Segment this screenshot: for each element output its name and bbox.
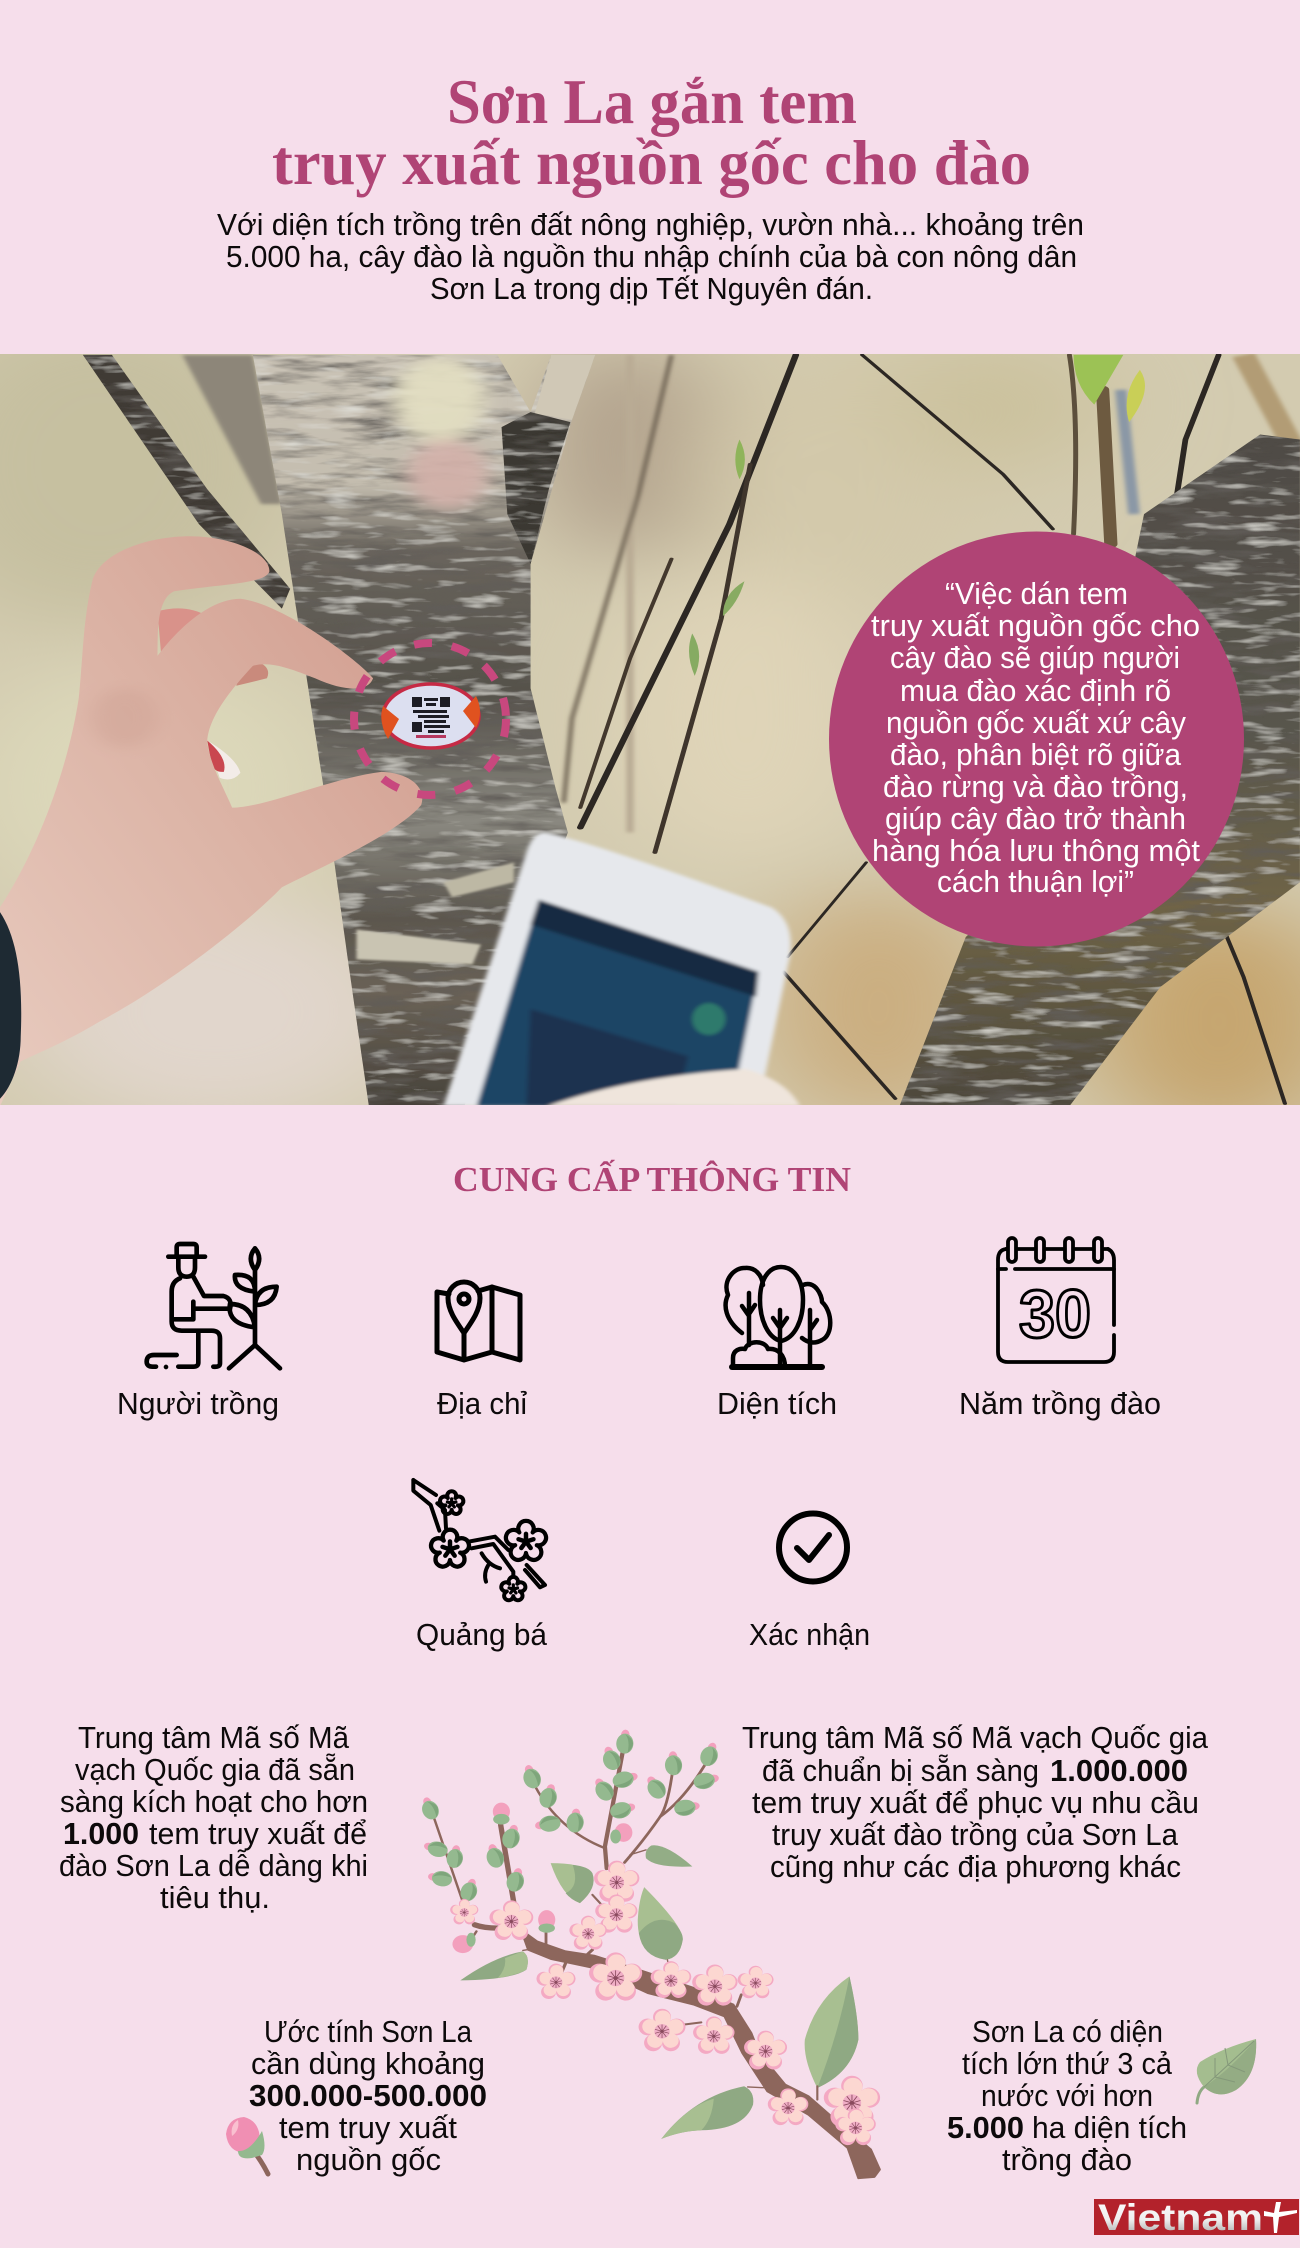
icon: trees bbox=[726, 1267, 830, 1367]
text: bottom left note bbox=[249, 2014, 487, 2177]
icon: map with pin bbox=[437, 1282, 520, 1360]
branch bbox=[434, 1752, 817, 2100]
quote circle: nguồn gốc xuất xứ cây bbox=[886, 705, 1186, 740]
title bbox=[272, 67, 1031, 198]
quote circle: truy xuất nguồn gốc cho bbox=[871, 608, 1200, 643]
illustration: peach blossom branch bbox=[418, 1729, 880, 2178]
blossoms bbox=[450, 1861, 880, 2145]
quote circle: cây đào sẽ giúp người bbox=[890, 640, 1180, 675]
left dark branch bbox=[83, 355, 290, 609]
label: quảng bá: Quảng bá bbox=[416, 1617, 548, 1652]
text: bottom left note: tem truy xuất bbox=[279, 2110, 457, 2145]
quote circle: cách thuận lợi” bbox=[937, 864, 1134, 899]
quote circle: hàng hóa lưu thông một bbox=[872, 833, 1200, 868]
text: bottom left note: Ước tính Sơn La bbox=[264, 2014, 473, 2049]
logo: Vietnam+ bbox=[1094, 2197, 1299, 2238]
text: top left note: đào Sơn La dễ dàng khi bbox=[59, 1848, 368, 1883]
text: bottom right note: ha diện tích bbox=[1032, 2110, 1187, 2145]
smartphone bbox=[444, 833, 800, 1106]
young leaves bbox=[689, 355, 1145, 676]
bark highlights bbox=[356, 862, 514, 964]
quote circle: mua đào xác định rõ bbox=[900, 673, 1171, 708]
text: top left note: Trung tâm Mã số Mã bbox=[78, 1720, 350, 1755]
text: top right note bbox=[742, 1720, 1209, 1884]
text: bottom right note: 5.000 bbox=[947, 2110, 1024, 2145]
text: bottom right note: nước với hơn bbox=[981, 2078, 1153, 2113]
text: bottom right note: trồng đào bbox=[1002, 2142, 1132, 2177]
quote circle: đào, phân biệt rõ giữa bbox=[890, 737, 1182, 772]
title: Sơn La gắn tem bbox=[447, 67, 857, 137]
text: top right note: 1.000.000 bbox=[1050, 1753, 1188, 1788]
text: bottom right note bbox=[947, 2014, 1187, 2177]
text: top left note: tem truy xuất để bbox=[149, 1816, 367, 1851]
blurred background twigs bbox=[564, 355, 1300, 833]
text: top left note bbox=[59, 1720, 368, 1915]
buds bbox=[418, 1729, 722, 1903]
QR stamp bbox=[381, 684, 480, 748]
icon: green leaf bbox=[1197, 2039, 1256, 2103]
quote circle: giúp cây đào trở thành bbox=[885, 801, 1186, 836]
title: truy xuất nguồn gốc cho đào bbox=[272, 128, 1031, 198]
label: năm trồng đào: Năm trồng đào bbox=[959, 1386, 1161, 1421]
text: top right note: Trung tâm Mã số Mã vạch Quốc gia bbox=[742, 1720, 1209, 1755]
text: bottom left note: nguồn gốc bbox=[296, 2142, 441, 2177]
text: top right note: truy xuất đào trồng của Sơn La bbox=[772, 1817, 1179, 1852]
main trunk bbox=[253, 355, 595, 1106]
text: top left note: sàng kích hoạt cho hơn bbox=[60, 1784, 368, 1819]
large pink buds bbox=[452, 1803, 632, 1953]
text: top left note: tiêu thụ. bbox=[160, 1880, 270, 1915]
blurred photo background bbox=[0, 354, 1300, 1105]
quote circle: “Việc dán tem bbox=[945, 576, 1128, 611]
text: top left note: vạch Quốc gia đã sẵn bbox=[75, 1752, 355, 1787]
text: top right note: cũng như các địa phương khác bbox=[770, 1849, 1181, 1884]
blurred foreground blossom on trunk bbox=[394, 357, 487, 509]
icon: farmer planting bbox=[147, 1244, 280, 1368]
icon: blossom branch bbox=[413, 1480, 546, 1600]
text: bottom left note: cần dùng khoảng bbox=[251, 2046, 485, 2081]
hand bbox=[0, 536, 422, 1106]
label: người trồng: Người trồng bbox=[117, 1386, 279, 1421]
text: bottom right note: Sơn La có diện bbox=[972, 2014, 1163, 2049]
label: diện tích: Diện tích bbox=[717, 1386, 837, 1421]
label: địa chỉ: Địa chỉ bbox=[437, 1386, 527, 1421]
heading: cung cấp thông tin: CUNG CẤP THÔNG TIN bbox=[453, 1159, 851, 1199]
text: bottom right note: tích lớn thứ 3 cả bbox=[962, 2046, 1173, 2081]
thin branches bbox=[580, 355, 1300, 1104]
intro text: 5.000 ha, cây đào là nguồn thu nhập chính của bà con nông dân bbox=[226, 239, 1077, 274]
logo: Vietnam+: Vietnam bbox=[1098, 2197, 1263, 2238]
text: top right note: đã chuẩn bị sẵn sàng bbox=[762, 1753, 1039, 1788]
intro text: Sơn La trong dịp Tết Nguyên đán. bbox=[430, 271, 873, 306]
icon: pink bud bbox=[226, 2117, 268, 2174]
text: top left note: 1.000 bbox=[63, 1816, 139, 1851]
leaves bbox=[460, 1845, 858, 2139]
quote circle: đào rừng và đào trồng, bbox=[883, 769, 1188, 804]
icon: calendar 30: 30 bbox=[1019, 1276, 1091, 1352]
photo: scanning QR stamp on a peach tree bbox=[0, 354, 1300, 1105]
quote circle bbox=[829, 532, 1244, 946]
back grey limb bbox=[182, 355, 282, 504]
right trunk bbox=[899, 435, 1300, 1106]
icon: calendar 30 bbox=[998, 1238, 1114, 1362]
intro text: Với diện tích trồng trên đất nông nghiệp, vườn nhà... khoảng trên bbox=[217, 207, 1084, 242]
intro text bbox=[217, 207, 1084, 306]
text: top right note: tem truy xuất để phục vụ nhu cầu bbox=[752, 1785, 1199, 1820]
label: xác nhận: Xác nhận bbox=[749, 1617, 870, 1652]
dashed ring around QR stamp bbox=[354, 643, 506, 795]
icon: check circle bbox=[779, 1514, 847, 1582]
text: bottom left note: 300.000-500.000 bbox=[249, 2078, 487, 2113]
